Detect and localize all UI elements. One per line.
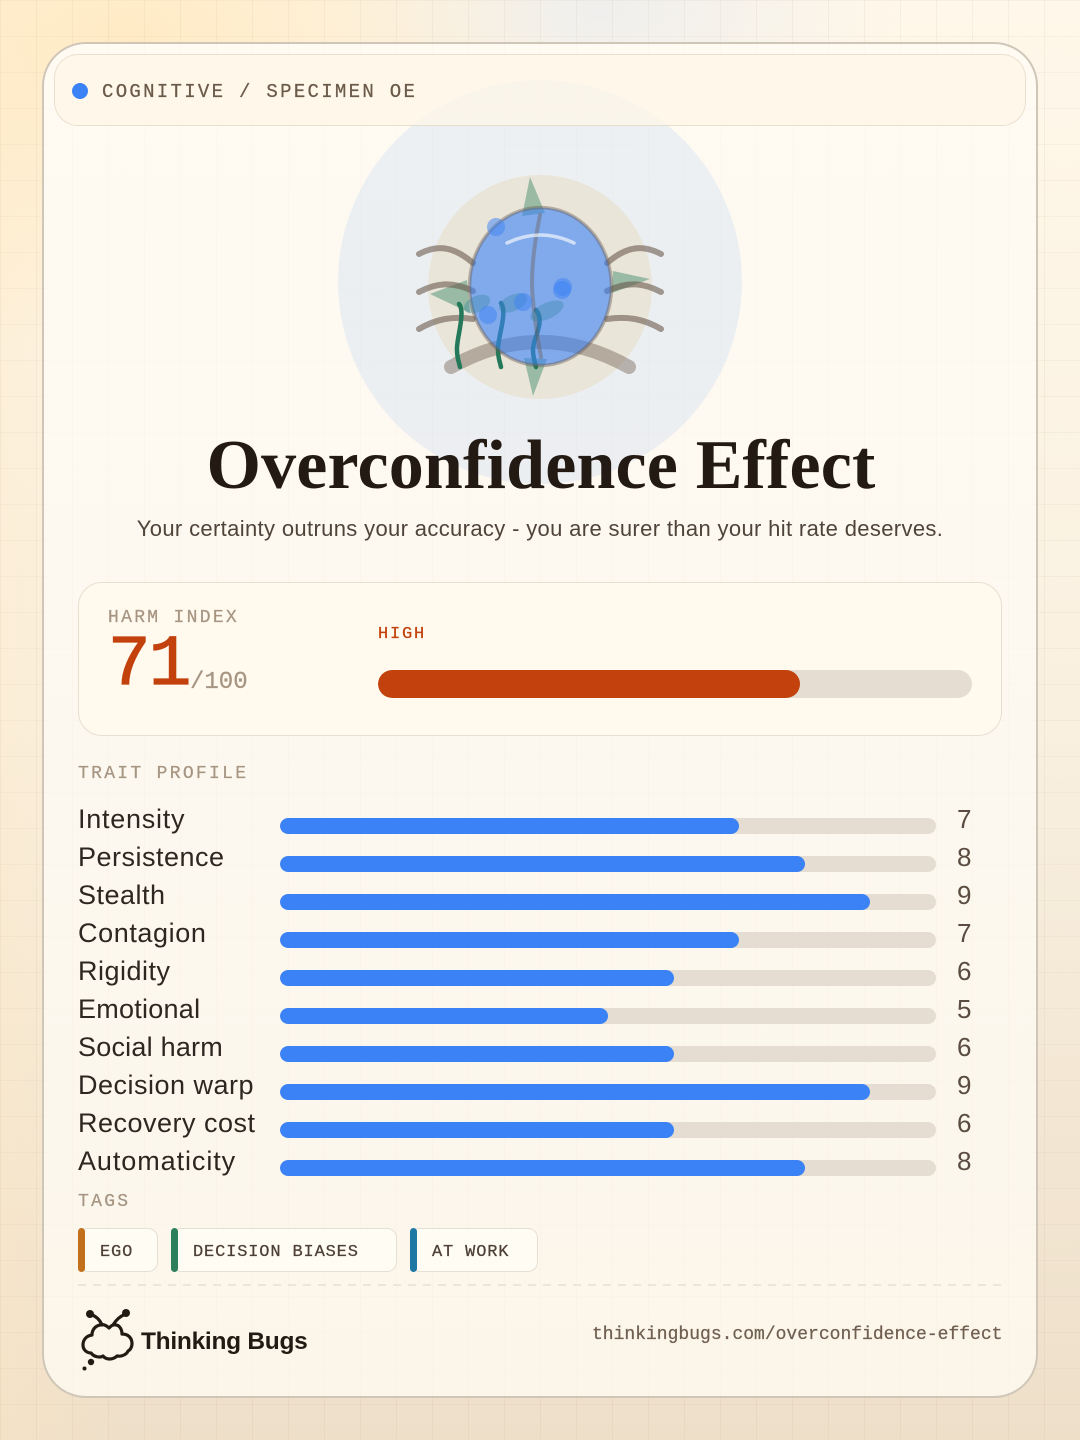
trait: Rigidity: Rigidity <box>78 956 171 986</box>
trait: Decision warp <box>78 1070 971 1100</box>
category dot <box>72 83 88 99</box>
illustration: bug specimen <box>338 126 742 484</box>
bug centre line <box>532 215 541 357</box>
trait profile heading: TRAIT PROFILE <box>78 764 248 784</box>
trait: Stealth: Stealth <box>78 880 166 910</box>
tag: ego: EGO <box>100 1243 133 1262</box>
trait: Automaticity: Automaticity <box>78 1146 236 1176</box>
panel: category header bar <box>54 54 1026 126</box>
tags heading: TAGS <box>78 1192 130 1212</box>
trait: Decision warp: Decision warp <box>78 1070 254 1100</box>
panel: harm index <box>78 582 1002 736</box>
trait: Automaticity: 8 <box>957 1146 971 1176</box>
harm score: 71 <box>108 626 190 706</box>
harm bar <box>378 670 972 698</box>
tag: at work: AT WORK <box>432 1243 509 1262</box>
trait: Recovery cost <box>78 1108 971 1138</box>
trait: Persistence: Persistence <box>78 842 225 872</box>
tag: ego <box>78 1228 158 1272</box>
trait: Automaticity <box>78 1146 971 1176</box>
bug highlight <box>507 235 574 243</box>
trait: Contagion: Contagion <box>78 918 206 948</box>
bug body <box>470 208 612 366</box>
category label: COGNITIVE / SPECIMEN OE <box>102 81 417 103</box>
trait: Social harm <box>78 1032 971 1062</box>
harm score maximum: /100 <box>190 669 248 696</box>
trait: Emotional: 5 <box>957 994 971 1024</box>
trait: Recovery cost: Recovery cost <box>78 1108 256 1138</box>
inner halo circle <box>428 175 652 399</box>
trait: Contagion <box>78 918 971 948</box>
trait: Decision warp: 9 <box>957 1070 971 1100</box>
trait: Emotional <box>78 994 971 1024</box>
trait: Contagion: 7 <box>957 918 971 948</box>
trait: Persistence <box>78 842 971 872</box>
bug ground arc <box>451 342 629 367</box>
trait: Persistence: 8 <box>957 842 971 872</box>
trait: Emotional: Emotional <box>78 994 200 1024</box>
trait: Rigidity <box>78 956 971 986</box>
trait chart <box>78 804 971 1176</box>
trait: Social harm: Social harm <box>78 1032 223 1062</box>
logo icon: thinking bug <box>81 1309 134 1370</box>
harm index label: HARM INDEX <box>108 608 239 628</box>
bug legs <box>419 248 661 329</box>
title: Overconfidence Effect <box>206 427 875 504</box>
bug spots <box>479 218 572 324</box>
trait: Stealth: 9 <box>957 880 971 910</box>
trait: Intensity <box>78 804 971 834</box>
bug tendrils <box>457 303 540 367</box>
tag: decision biases: DECISION BIASES <box>193 1243 359 1262</box>
trait: Intensity: Intensity <box>78 804 185 834</box>
trait: Stealth <box>78 880 971 910</box>
trait: Rigidity: 6 <box>957 956 971 986</box>
bug leaves <box>461 289 567 326</box>
severity label: HIGH <box>378 625 426 644</box>
tag: at work <box>410 1228 538 1272</box>
trait: Intensity: 7 <box>957 804 971 834</box>
tag: decision biases <box>171 1228 397 1272</box>
bug spikes <box>430 177 650 396</box>
halo circle <box>338 80 742 484</box>
brand name: Thinking Bugs <box>141 1328 307 1355</box>
trait: Social harm: 6 <box>957 1032 971 1062</box>
trait: Recovery cost: 6 <box>957 1108 971 1138</box>
subtitle: Your certainty outruns your accuracy - you are surer than your hit rate deserves. <box>137 516 943 541</box>
source url: thinkingbugs.com/overconfidence-effect <box>592 1325 1002 1345</box>
